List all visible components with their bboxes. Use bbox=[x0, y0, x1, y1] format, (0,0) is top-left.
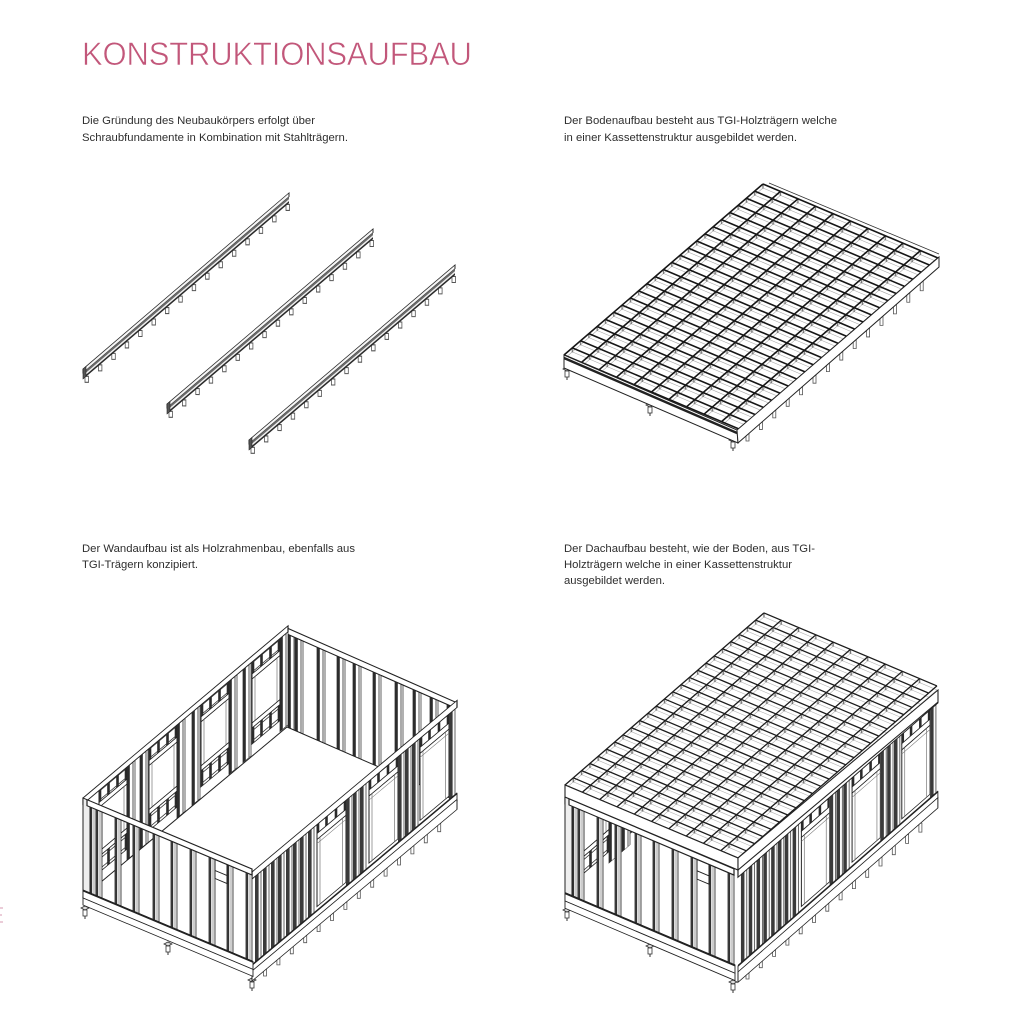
lower joist edges bbox=[564, 188, 938, 433]
floor bbox=[565, 728, 938, 973]
upper roof joist edges bbox=[565, 613, 937, 858]
feet bbox=[746, 823, 922, 979]
front right wall bbox=[738, 696, 938, 982]
text block: floor bbox=[564, 115, 837, 144]
front left wall bbox=[565, 797, 735, 981]
front feet bbox=[563, 367, 737, 451]
vertical blocking ticks bbox=[564, 184, 938, 429]
front right wall bbox=[252, 700, 457, 981]
upper joist edges bbox=[564, 184, 938, 429]
title: KONSTRUKTIONSAUFBAU bbox=[82, 36, 472, 72]
left back wall bbox=[83, 626, 288, 897]
text block: floor: in einer Kassettenstruktur ausgebildet werden. bbox=[564, 132, 797, 144]
right fascia bbox=[737, 257, 939, 443]
front fascia bbox=[564, 355, 738, 443]
drawing: timber frame walls bbox=[81, 626, 457, 991]
drawing: steel beams on screw foundations bbox=[83, 192, 455, 458]
text block: foundation: Die Gründung des Neubaukörpers erfolgt über bbox=[82, 115, 315, 127]
beam 2 bbox=[167, 228, 373, 422]
drawing: roof on top of walls bbox=[563, 613, 938, 993]
text block: roof: Der Dachaufbau besteht, wie der Boden, aus TGI- bbox=[564, 543, 815, 555]
text block: foundation bbox=[82, 115, 348, 144]
left back wall seen through bbox=[565, 621, 770, 901]
roof plane bbox=[565, 613, 938, 858]
text block: roof: ausgebildet werden. bbox=[564, 575, 665, 587]
back wall bbox=[287, 628, 455, 801]
text block: walls: TGI-Trägern konzipiert. bbox=[82, 559, 198, 571]
beam 1 bbox=[83, 192, 289, 387]
grid plane bbox=[564, 184, 939, 430]
text block: floor: Der Bodenaufbau besteht aus TGI-Holzträgern welche bbox=[564, 115, 837, 127]
beam 3 bbox=[249, 264, 455, 458]
back double edge bbox=[769, 183, 939, 254]
right fascia bbox=[738, 690, 938, 870]
clipped page-edge fragment bbox=[0, 908, 3, 922]
text block: roof bbox=[564, 543, 815, 587]
feet bbox=[264, 822, 441, 976]
front fascia bbox=[565, 785, 738, 870]
front left wall bbox=[83, 798, 253, 976]
right side feet bbox=[746, 281, 923, 441]
floor slab bbox=[83, 727, 457, 969]
text block: roof: Holzträgern welche in einer Kassettenstruktur bbox=[564, 559, 792, 571]
text block: foundation: Schraubfundamente in Kombination mit Stahlträgern. bbox=[82, 132, 348, 144]
roof blocking ticks bbox=[565, 613, 937, 858]
text block: walls bbox=[82, 543, 356, 571]
lower roof joist edges bbox=[565, 617, 937, 862]
text block: walls: Der Wandaufbau ist als Holzrahmenbau, ebenfalls aus bbox=[82, 543, 356, 555]
drawing: floor cassette structure bbox=[563, 183, 939, 451]
